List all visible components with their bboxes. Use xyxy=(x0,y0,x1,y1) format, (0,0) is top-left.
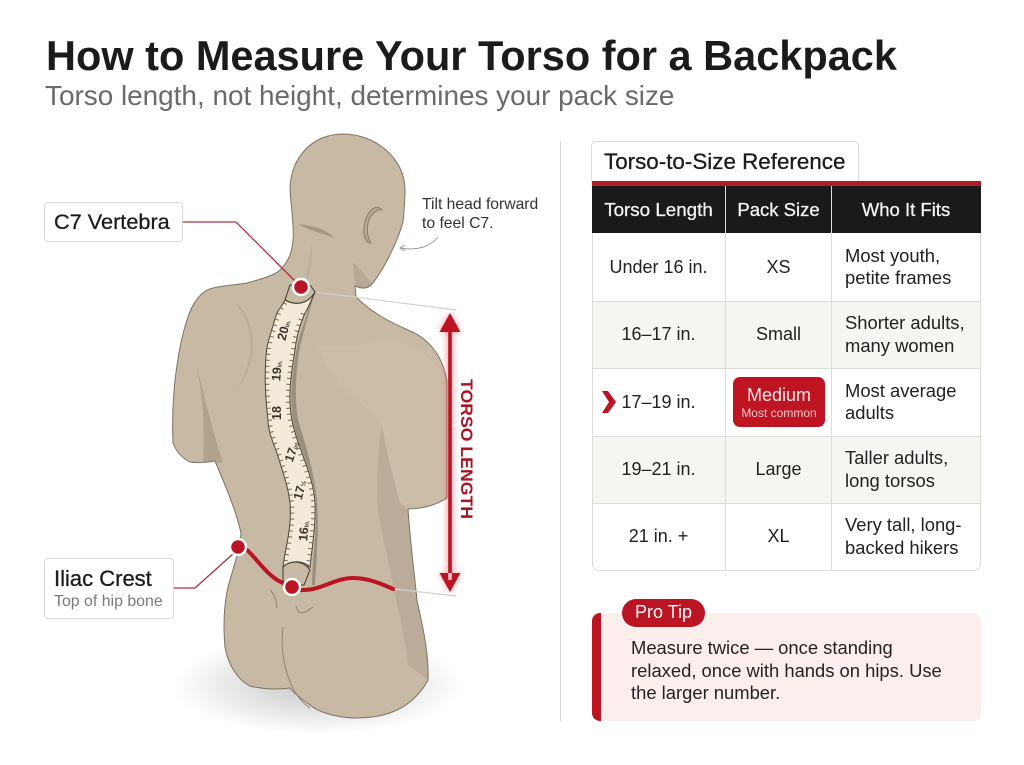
buttock lines xyxy=(270,590,313,708)
pro tip text: relaxed, once with hands on hips. Use xyxy=(631,660,942,680)
tape numbers xyxy=(269,318,312,542)
header cells: Torso Length xyxy=(604,198,713,220)
neck crease xyxy=(298,224,334,238)
table tab heading: Torso-to-Size Reference xyxy=(604,149,845,174)
row: Large: 19–21 in. xyxy=(621,459,696,479)
row: XL: XL xyxy=(767,526,790,546)
row: XS xyxy=(609,244,951,288)
leader: iliac crest xyxy=(174,553,234,588)
marker: C7 dot xyxy=(293,279,309,295)
vertical divider xyxy=(560,141,561,721)
callout: C7 vertebra: C7 Vertebra xyxy=(54,209,170,234)
table outline xyxy=(592,186,981,571)
iliac crest line xyxy=(247,550,393,590)
callout: iliac crest: Iliac Crest xyxy=(54,566,152,591)
row: Small: Shorter adults, xyxy=(845,312,965,333)
pro tip text: the larger number. xyxy=(631,682,780,703)
tape numbers: 20in. xyxy=(275,318,294,342)
row: Medium: adults xyxy=(845,402,894,423)
tape numbers: 19in. xyxy=(269,359,285,382)
marker: hip dot xyxy=(230,539,246,555)
row: XS: petite frames xyxy=(845,267,951,288)
tape numbers: 17½ xyxy=(291,478,309,501)
row: Medium xyxy=(602,377,956,427)
row: Small: many women xyxy=(845,334,954,356)
row: XL: 21 in. + xyxy=(629,526,688,546)
pro tip text xyxy=(631,637,942,703)
callout: iliac crest xyxy=(44,558,174,619)
table: torso to size: Who It Fits xyxy=(862,198,950,220)
shaded rows xyxy=(593,301,980,368)
tape numbers: 17in. xyxy=(282,439,303,464)
note: tilt head: to feel C7. xyxy=(422,215,494,232)
tape numbers: 16in. xyxy=(296,519,312,542)
row: XS: XS xyxy=(766,256,790,276)
arrow: torso length xyxy=(440,313,460,592)
row: Medium: 17–19 in. xyxy=(621,392,696,412)
red side bar xyxy=(592,613,601,721)
measuring tape xyxy=(265,285,315,585)
header band xyxy=(592,186,981,233)
panel: pro tip xyxy=(592,613,981,721)
body shading xyxy=(197,240,447,680)
row: XL: backed hikers xyxy=(845,536,958,558)
note: tilt head xyxy=(422,196,538,232)
row: Large xyxy=(621,447,948,491)
callout: C7 vertebra xyxy=(44,202,183,242)
leader: C7 xyxy=(183,222,297,283)
red header rule xyxy=(592,181,981,186)
ground shadow xyxy=(173,635,463,735)
badge: medium: Medium xyxy=(747,385,811,405)
row: Large: Large xyxy=(755,459,802,479)
row: Medium: Most average xyxy=(845,380,956,400)
label: torso length: TORSO LENGTH xyxy=(457,379,476,519)
badge: medium: Most common xyxy=(741,406,817,420)
row: Large: Taller adults, xyxy=(845,447,948,468)
body silhouette xyxy=(173,134,447,718)
row: Small: Small xyxy=(756,324,801,344)
tape numbers: 18 xyxy=(270,406,284,420)
table: torso to size: Pack Size xyxy=(737,198,820,220)
badge: pro tip: Pro Tip xyxy=(635,602,692,622)
title: How to Measure Your Torso for a Backpack xyxy=(46,32,897,79)
callout: iliac crest: Top of hip bone xyxy=(54,593,163,610)
chevron marker xyxy=(602,391,616,413)
row: XS: Under 16 in. xyxy=(609,256,708,276)
marker: spine base dot xyxy=(284,579,300,595)
table tab heading xyxy=(591,141,859,182)
ear xyxy=(364,207,382,243)
badge: medium xyxy=(733,377,825,427)
row: XL xyxy=(629,514,962,558)
row: XS: Most youth, xyxy=(845,244,940,266)
note: tilt head: Tilt head forward xyxy=(422,196,538,213)
row: Small: 16–17 in. xyxy=(621,324,696,344)
row: Large: long torsos xyxy=(845,470,935,490)
curved arrow to head xyxy=(400,237,438,251)
badge: pro tip xyxy=(622,599,705,627)
illustration: back view of torso with measuring tape xyxy=(172,134,476,728)
subtitle: Torso length, not height, determines your pack size xyxy=(45,80,674,111)
guide lines xyxy=(315,292,456,596)
row: Small xyxy=(621,312,965,356)
pro tip text: Measure twice — once standing xyxy=(631,637,893,658)
row: XL: Very tall, long- xyxy=(845,514,962,535)
